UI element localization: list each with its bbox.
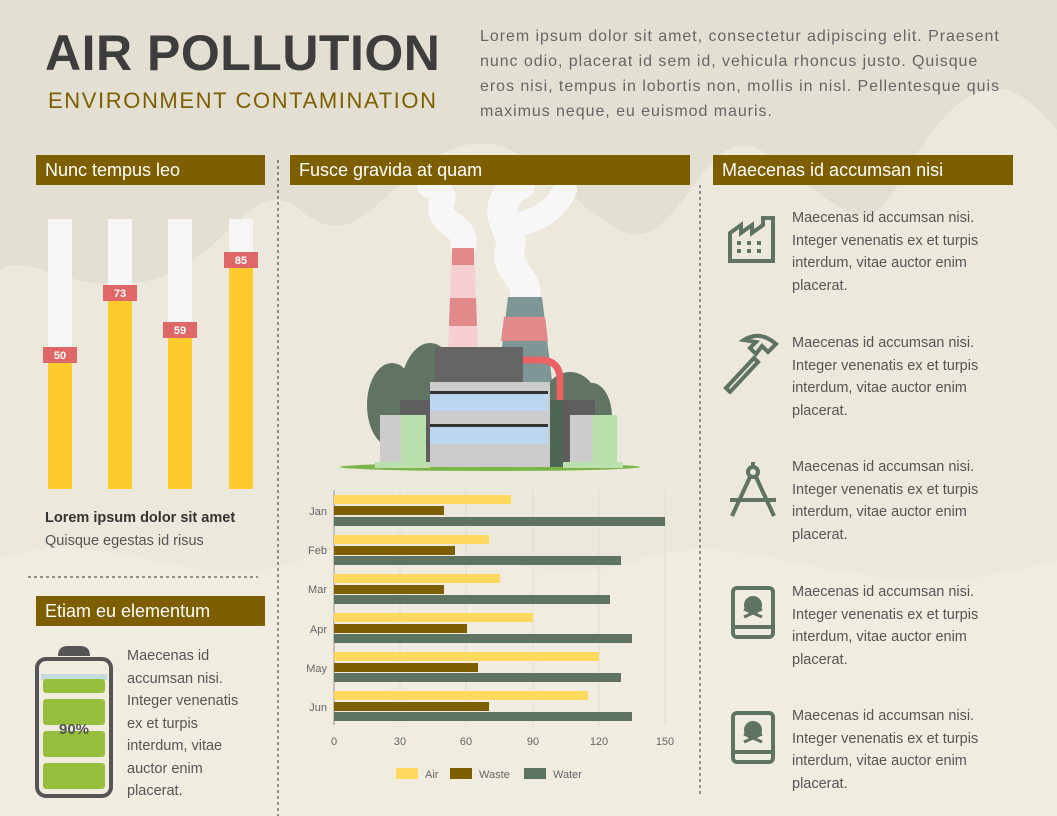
battery text: ex et turpis (127, 716, 198, 732)
icon: factory (728, 216, 775, 263)
header: Maecenas: Maecenas id accumsan nisi (722, 160, 943, 180)
intro text: Lorem ipsum dolor sit amet, consectetur adipiscing elit. Praesent (480, 28, 1000, 45)
caption (45, 510, 236, 549)
progress bars chart: 73 (114, 288, 126, 300)
bar chart: Jun (309, 702, 327, 714)
bar chart: Waste (479, 769, 510, 781)
bar chart: 90 (527, 736, 539, 748)
intro text: eros nisi, tempus in lobortis non, mollis in nisl. Pellentesque quis (480, 78, 1000, 95)
text 4: Maecenas id accumsan nisi. Integer venenatis ex et turpis interdum, vitae auctor enim placerat. (792, 584, 978, 668)
battery text: auctor enim (127, 760, 203, 776)
battery text: interdum, vitae (127, 738, 222, 754)
intro text: maximus neque, eu euismod mauris. (480, 103, 773, 120)
header: Nunc tempus leo: Nunc tempus leo (45, 160, 180, 180)
bar chart: 30 (394, 736, 406, 748)
icon: hammer (723, 334, 779, 394)
progress bars chart (43, 219, 258, 489)
title: AIR POLLUTION (45, 25, 440, 81)
icon: battery: 90% (59, 721, 89, 738)
bar chart: Air (425, 769, 439, 781)
header: Etiam: Etiam eu elementum (45, 601, 210, 621)
battery text: placerat. (127, 783, 183, 799)
progress bars chart: 59 (174, 325, 186, 337)
header: Fusce gravida: Fusce gravida at quam (299, 160, 482, 180)
progress bars chart: 85 (235, 255, 247, 267)
header: Maecenas (713, 155, 1013, 185)
bar chart: 60 (460, 736, 472, 748)
bar chart (306, 490, 674, 781)
text 2: Maecenas id accumsan nisi. Integer venenatis ex et turpis interdum, vitae auctor enim placerat. (792, 335, 978, 418)
bar chart: May (306, 663, 327, 675)
text 5: Maecenas id accumsan nisi. Integer venenatis ex et turpis interdum, vitae auctor enim placerat. (792, 708, 978, 792)
intro text: nunc odio, placerat id sem id, vehicula rhoncus justo. Quisque (480, 53, 978, 70)
battery text (127, 648, 238, 799)
illustration: factory (340, 185, 640, 471)
icon: battery (35, 646, 113, 798)
icon: compass (730, 462, 776, 517)
bar chart: 150 (656, 736, 674, 748)
header: Etiam (36, 596, 265, 626)
bar chart: 120 (590, 736, 608, 748)
text 3: Maecenas id accumsan nisi. Integer venenatis ex et turpis interdum, vitae auctor enim placerat. (792, 459, 978, 542)
bar chart: Feb (308, 545, 327, 557)
bar chart: 0 (331, 736, 337, 748)
battery text: Maecenas id (127, 648, 209, 664)
bar chart: Water (553, 769, 582, 781)
caption: Quisque egestas id risus (45, 533, 204, 549)
caption: Lorem ipsum dolor sit amet (45, 510, 235, 526)
subtitle: ENVIRONMENT CONTAMINATION (48, 88, 438, 113)
battery text: accumsan nisi. (127, 670, 223, 686)
bar chart: Apr (310, 624, 327, 636)
text 1: Maecenas id accumsan nisi. Integer venenatis ex et turpis interdum, vitae auctor enim placerat. (792, 210, 978, 294)
bar chart: Mar (308, 584, 327, 596)
icon: poison book (731, 586, 775, 639)
intro text (480, 28, 1000, 120)
bar chart: Jan (309, 506, 327, 518)
icon: poison book 2 (731, 711, 775, 764)
header: Fusce gravida (290, 155, 690, 185)
battery text: Integer venenatis (127, 693, 238, 709)
progress bars chart: 50 (54, 350, 66, 362)
header: Nunc tempus leo (36, 155, 265, 185)
